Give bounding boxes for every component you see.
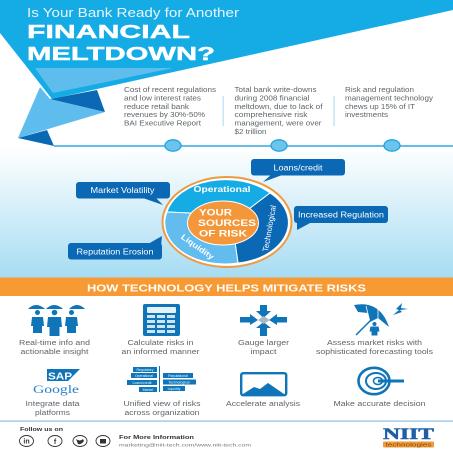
caption: real-time info: actionable insight — [20, 349, 89, 356]
icon: risk tree: Operational — [135, 374, 153, 378]
caption: assess market risks — [316, 340, 434, 356]
caption: accelerate analysis: Accelerate analysis — [226, 401, 301, 408]
section band: HOW TECHNOLOGY HELPS MITIGATE RISKS — [87, 284, 366, 294]
title — [27, 6, 239, 64]
stat: regulations cost: Cost of recent regulations — [124, 87, 217, 94]
stat: regulations cost: BAI Executive Report — [124, 120, 201, 128]
icon: risk tree: Loans/credit — [132, 381, 152, 385]
icon: umbrella and lightning — [354, 303, 408, 336]
contact info: marketing@niit-tech.com/www.niit-tech.com — [119, 442, 251, 448]
stat: write-downs — [234, 87, 323, 136]
callout: reputation erosion: Reputation Erosion — [76, 248, 154, 256]
segment: liquidity: Liquidity — [179, 232, 216, 262]
caption: assess market risks: Assess market risks with — [327, 340, 422, 347]
caption: integrate data — [26, 401, 80, 417]
banner ribbon — [0, 0, 453, 146]
icon: target — [358, 368, 404, 394]
stat: regulations cost — [124, 87, 217, 128]
callout: loans/credit — [251, 159, 345, 182]
callout: market volatility: Market Volatility — [90, 186, 154, 195]
stat: write-downs: meltdown, due to lack of — [234, 104, 323, 111]
caption: unified view: Unified view of risks — [124, 401, 201, 408]
contact info — [119, 435, 251, 448]
callout: reputation erosion — [68, 236, 162, 260]
callout: loans/credit: Loans/credit — [274, 164, 323, 172]
social links — [20, 427, 110, 446]
stat: technology share: management technology — [345, 96, 434, 102]
risk wheel — [162, 177, 292, 267]
centre label: YOUR — [199, 208, 232, 218]
stat: write-downs: $2 trillion — [234, 129, 267, 136]
stat: write-downs: during 2008 financial — [234, 96, 310, 102]
title: Is Your Bank Ready for Another — [27, 6, 239, 20]
social links: in — [23, 438, 30, 446]
centre label: SOURCES — [198, 218, 256, 229]
caption: calculate risks: Calculate risks in — [128, 340, 194, 347]
section band — [0, 278, 453, 296]
stat: regulations cost: and low interest rates — [124, 96, 202, 102]
caption: gauge impact — [238, 340, 290, 356]
stat: write-downs: management, were over — [234, 120, 322, 128]
stat: write-downs: comprehensive risk — [234, 112, 308, 119]
contact info: For More Information — [119, 435, 195, 441]
stat: write-downs: Total bank write-downs — [234, 87, 317, 94]
icon: risk tree: Reputational — [168, 374, 188, 378]
caption: real-time info — [19, 340, 90, 356]
caption: integrate data: Integrate data — [26, 401, 80, 408]
icon: SAP and Google logos: Google — [33, 382, 79, 396]
icon: risk tree: Liquidity — [168, 387, 181, 391]
callout: increased regulation: Increased Regulation — [298, 210, 384, 220]
caption: gauge impact: impact — [250, 349, 277, 356]
centre label — [188, 201, 258, 245]
caption: real-time info: Real-time info and — [19, 340, 90, 347]
stat: technology share: Risk and regulation — [345, 87, 414, 94]
caption: unified view: across organization — [124, 410, 200, 417]
caption: gauge impact: Gauge larger — [238, 340, 290, 347]
title: FINANCIAL — [27, 22, 190, 42]
stat: regulations cost: revenues by 30%-50% — [124, 112, 205, 119]
social links: f — [54, 439, 57, 446]
logo: NIIT Technologies: NIIT — [383, 426, 434, 443]
icon: SAP and Google logos — [33, 369, 80, 396]
caption: calculate risks — [122, 340, 200, 356]
icon: risk tree: Regulatory — [137, 368, 154, 372]
social links: Follow us on — [20, 427, 64, 433]
title: MELTDOWN? — [27, 44, 215, 64]
icon: calculator — [143, 304, 180, 336]
icon: converging arrows — [240, 305, 287, 336]
callout: increased regulation — [294, 206, 388, 230]
segment: operational: Operational — [194, 185, 250, 194]
icon: people with umbrellas — [28, 305, 85, 336]
icon: risk tree: Technological — [168, 380, 190, 384]
icon: SAP and Google logos: SAP — [48, 372, 72, 382]
icon: risk tree: Market — [143, 388, 153, 392]
caption: calculate risks: an informed manner — [122, 349, 200, 356]
segment: technological: Technological — [261, 204, 278, 252]
centre label: OF RISK — [199, 228, 247, 240]
caption: unified view — [124, 401, 201, 417]
callout: market volatility — [76, 182, 170, 205]
icon: risk tree — [127, 366, 196, 392]
logo: NIIT Technologies — [383, 426, 434, 448]
stat: technology share: chews up 15% of IT — [345, 104, 416, 111]
caption: accurate decision: Make accurate decision — [334, 401, 426, 408]
icon: mountain picture — [241, 373, 286, 395]
caption: integrate data: platforms — [35, 410, 71, 417]
timeline — [54, 140, 453, 151]
stat: regulations cost: reduce retail bank — [124, 104, 190, 111]
logo: NIIT Technologies: technologies — [386, 442, 432, 448]
stat: technology share — [345, 87, 434, 119]
caption: assess market risks: sophisticated forecasting tools — [316, 349, 434, 356]
stat: technology share: investments — [345, 112, 389, 119]
